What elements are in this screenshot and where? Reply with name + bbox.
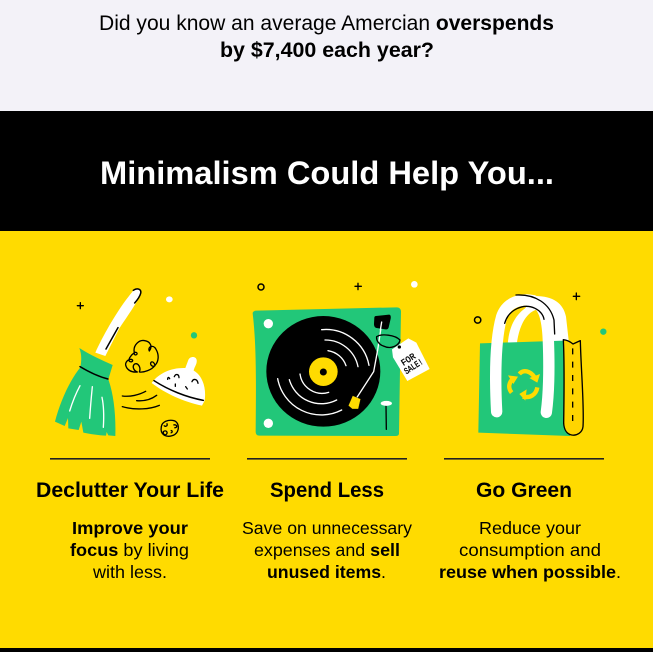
column: go green — [439, 293, 621, 582]
body: spend less: unused items. — [267, 562, 386, 582]
dust ball — [161, 420, 178, 436]
tonearm — [356, 323, 382, 399]
intro text: Did you know an average Amercian overspends — [99, 12, 554, 35]
column: spend less — [242, 281, 430, 582]
sparkles — [258, 284, 264, 290]
intro text: by $7,400 each year? — [220, 39, 434, 62]
record label — [309, 357, 338, 386]
sparkles — [474, 317, 481, 323]
turntable base — [253, 307, 401, 436]
broom handle — [95, 289, 141, 356]
body: declutter: focus by living — [70, 540, 189, 560]
broom head — [55, 348, 115, 436]
body: declutter — [70, 518, 189, 582]
intro text — [99, 12, 554, 62]
bag body — [478, 341, 570, 436]
body: spend less: expenses and sell — [254, 540, 400, 560]
divider — [444, 458, 604, 460]
recycle arrows — [509, 371, 537, 397]
panel: yellow benefits — [0, 231, 653, 652]
dustpan — [152, 357, 205, 406]
body: go green: reuse when possible . — [439, 562, 621, 582]
title: Minimalism Could Help You... — [100, 155, 554, 191]
body: go green: Reduce your — [479, 518, 581, 538]
body: declutter: Improve your — [72, 518, 188, 538]
body: spend less — [242, 518, 412, 582]
price tag: FOR — [400, 351, 418, 369]
panel: title banner — [0, 111, 653, 231]
price tag — [377, 335, 430, 381]
vinyl record — [266, 316, 380, 427]
knob — [384, 405, 388, 429]
body: declutter: with less. — [92, 562, 167, 582]
body: go green: consumption and — [459, 540, 601, 560]
heading: declutter: Declutter Your Life — [36, 479, 224, 502]
panel: intro fact — [0, 0, 653, 111]
sweep lines — [122, 391, 159, 409]
divider — [50, 458, 210, 460]
sparkles — [77, 303, 83, 309]
divider — [247, 458, 407, 460]
side gusset — [563, 340, 583, 435]
front handle — [496, 300, 549, 412]
icon: reusable bag — [474, 293, 606, 436]
body: spend less: Save on unnecessary — [242, 518, 412, 538]
heading: spend less: Spend Less — [270, 479, 384, 502]
body: go green — [439, 518, 621, 582]
icon: turntable for sale — [253, 281, 430, 436]
heading: go green: Go Green — [476, 479, 572, 502]
price tag: SALE! — [403, 357, 425, 377]
icon: broom and dustpan — [55, 289, 205, 436]
dust cloud — [126, 340, 158, 372]
column: declutter — [36, 289, 224, 582]
back handle — [508, 296, 569, 345]
